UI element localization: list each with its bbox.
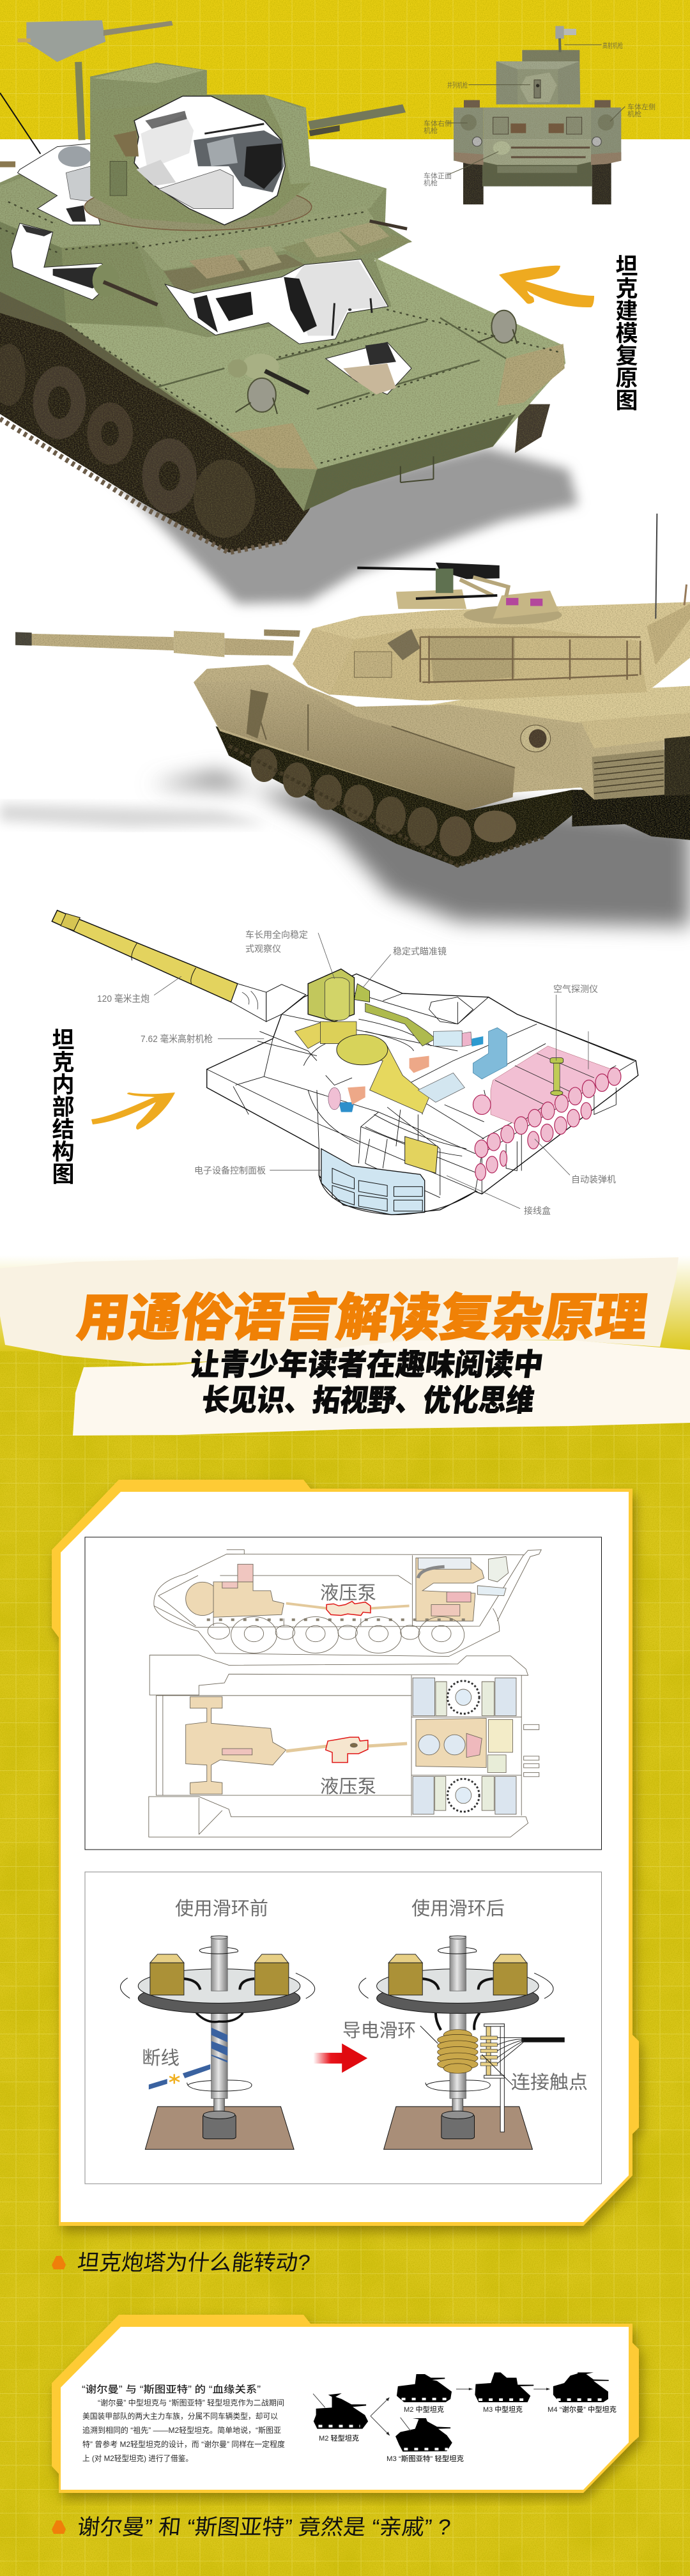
commander sight bbox=[308, 969, 436, 1046]
panel body text: 特” 曾参考 M2轻型坦克的设计，而 “谢尔曼” 同样在一定程度 bbox=[82, 2439, 285, 2449]
label: 车体正面机枪: 机枪 bbox=[424, 178, 438, 187]
front hatches bbox=[164, 222, 412, 293]
label: 导电滑环: 导电滑环 bbox=[342, 2020, 416, 2041]
headline: 用通俗语言解读复杂原理 bbox=[74, 1289, 651, 1347]
yellow grid background: lower section bbox=[0, 1255, 690, 2576]
electronics panel bbox=[319, 1149, 475, 1215]
vertical label: 坦克建模复原图: 坦克建模复原图 bbox=[615, 254, 638, 413]
rear engine cutaway bbox=[0, 143, 100, 225]
subhead: 让青少年读者在趣味阅读中 bbox=[188, 1347, 545, 1381]
caption text: 坦克炮塔为什么能转动? bbox=[76, 2251, 311, 2275]
headlights bbox=[236, 310, 517, 482]
Abrams hull bbox=[194, 664, 690, 811]
Abrams machine guns and cupola bbox=[357, 514, 687, 624]
Abrams running gear bbox=[216, 726, 690, 867]
rounds row upper bbox=[475, 1068, 621, 1158]
plan view of tank bbox=[149, 1655, 539, 1837]
label: 稳定式瞄准镜: 稳定式瞄准镜 bbox=[393, 946, 447, 956]
caption 1 bbox=[52, 2251, 311, 2275]
turret cutaway line diagram bbox=[52, 910, 638, 1215]
label: 接线盒: 接线盒 bbox=[524, 1206, 551, 1216]
label: 车长用全向稳定式观察仪: 式观察仪 bbox=[245, 944, 281, 954]
label: 车体右侧机枪: 车体右侧 bbox=[424, 119, 452, 128]
shadow under tank 1 bbox=[83, 447, 578, 604]
label: 使用滑环后: 使用滑环后 bbox=[411, 1898, 505, 1919]
driver hatch engine view bbox=[326, 342, 411, 394]
vertical label: 坦克内部结构图: 坦克内部结构图 bbox=[52, 1028, 75, 1187]
blue and light-blue equipment bbox=[339, 1028, 507, 1112]
panel: Sherman and Stuart lineage bbox=[52, 2315, 639, 2493]
main gun bbox=[308, 104, 406, 136]
tank name labels: M4 “谢尔曼” 中型坦克 bbox=[548, 2405, 617, 2414]
label: 并列机枪: 并列机枪 bbox=[447, 80, 468, 89]
label: 连接触点: 连接触点 bbox=[511, 2072, 588, 2093]
tank name labels: M3 “斯图亚特” 轻型坦克 bbox=[387, 2454, 464, 2463]
turret bbox=[84, 63, 312, 231]
panel body text: 上 (对 M2轻型坦克) 进行了借鉴。 bbox=[82, 2454, 193, 2463]
label: 断线: 断线 bbox=[142, 2048, 180, 2069]
arrow pointing to tank 1 bbox=[499, 266, 594, 307]
silhouettes and arrows bbox=[313, 2372, 609, 2451]
label: 电子设备控制面板: 电子设备控制面板 bbox=[194, 1165, 266, 1176]
label: 自动装弹机: 自动装弹机 bbox=[571, 1174, 616, 1184]
leader lines bbox=[154, 933, 588, 1209]
label: 使用滑环前: 使用滑环前 bbox=[175, 1898, 268, 1919]
label: 120 毫米主炮: 120 毫米主炮 bbox=[97, 993, 150, 1004]
hull bbox=[454, 100, 621, 173]
AA machine gun bbox=[0, 20, 173, 154]
tank name labels: M2 中型坦克 bbox=[404, 2405, 444, 2414]
hull body outline bbox=[207, 974, 638, 1215]
caption marker bbox=[52, 2520, 66, 2534]
tank 2: M1 Abrams model bbox=[15, 514, 690, 867]
label: 车体正面机枪: 车体正面 bbox=[424, 171, 452, 180]
label: 车体左侧机枪: 车体左侧 bbox=[627, 102, 656, 111]
tracks bbox=[463, 162, 611, 204]
hydraulic diagram box bbox=[85, 1537, 602, 1850]
subhead: 长见识、拓视野、优化思维 bbox=[200, 1383, 536, 1417]
label: 液压泵 top: 液压泵 bbox=[320, 1583, 376, 1604]
tank name labels: M3 中型坦克 bbox=[483, 2405, 523, 2414]
turret cutaway interior bbox=[114, 96, 285, 225]
tank 1 front view inset bbox=[447, 26, 625, 204]
tank name labels bbox=[319, 2405, 617, 2463]
gun barrel bbox=[52, 910, 266, 1022]
left-side cutaway bbox=[11, 223, 158, 305]
label: 液压泵 bottom: 液压泵 bbox=[320, 1776, 376, 1797]
label: 空气探测仪: 空气探测仪 bbox=[553, 984, 598, 994]
torn paper banner bbox=[0, 1257, 690, 1436]
rounds row lower bbox=[475, 1103, 592, 1180]
panel body text: 美国装甲部队的两大主力车族，分属不同车辆类型，却可以 bbox=[82, 2411, 278, 2421]
tank name labels: M2 轻型坦克 bbox=[319, 2434, 359, 2442]
yellow grid band: top bbox=[0, 0, 690, 139]
front machine gun bbox=[228, 354, 309, 393]
turret bbox=[496, 50, 580, 104]
panel frame bbox=[52, 2315, 639, 2493]
leader lines bbox=[447, 45, 625, 175]
panel white interior bbox=[61, 1492, 629, 2222]
label: 车体右侧机枪: 机枪 bbox=[424, 126, 438, 135]
label: 高射机枪: 高射机枪 bbox=[602, 41, 623, 50]
before slip ring illustration bbox=[121, 1936, 315, 2149]
panel body text: 追溯到相同的 “祖先” ——M2轻型坦克。简单地说，“斯图亚 bbox=[82, 2425, 281, 2435]
side view of tank bbox=[154, 1550, 541, 1657]
panel white interior bbox=[61, 2327, 629, 2490]
subhead bbox=[188, 1347, 545, 1417]
arrow pointing to diagram bbox=[91, 1092, 175, 1130]
tank 1: M3 Stuart cutaway model bbox=[0, 20, 565, 553]
shadow under tank 2 bbox=[0, 772, 690, 926]
Abrams gun barrel bbox=[15, 629, 300, 657]
label: 车长用全向稳定式观察仪: 车长用全向稳定 bbox=[245, 930, 308, 940]
driver compartment cutaway bbox=[165, 259, 388, 344]
caption 2 bbox=[52, 2515, 452, 2540]
panel frame bbox=[52, 1480, 639, 2226]
yellow breech block bbox=[295, 1022, 438, 1173]
caption marker bbox=[52, 2256, 66, 2269]
panel body text bbox=[82, 2398, 285, 2463]
label: 车体左侧机枪: 机枪 bbox=[627, 109, 641, 118]
hull and deck bbox=[0, 143, 565, 511]
tank lineage chart bbox=[313, 2372, 617, 2463]
running gear bbox=[0, 290, 550, 553]
AA gun bbox=[555, 26, 576, 52]
red transition arrow bbox=[313, 2044, 367, 2073]
panel: turret hydraulic and slip ring bbox=[52, 1480, 639, 2226]
pink ammunition bbox=[328, 1046, 618, 1127]
Abrams turret bbox=[293, 602, 690, 701]
panel heading: “谢尔曼” 与 “斯图亚特” 的 “血缘关系” bbox=[82, 2384, 261, 2395]
label: 7.62 毫米高射机枪: 7.62 毫米高射机枪 bbox=[141, 1033, 213, 1045]
air sensor post bbox=[550, 1058, 564, 1096]
after slip ring illustration bbox=[359, 1936, 565, 2149]
slip ring diagram box bbox=[85, 1872, 602, 2184]
panel body text: “谢尔曼” 中型坦克与 “斯图亚特” 轻型坦克作为二战期间 bbox=[98, 2398, 284, 2407]
caption text: 谢尔曼” 和 “斯图亚特” 竟然是 “亲戚” ? bbox=[76, 2515, 452, 2540]
